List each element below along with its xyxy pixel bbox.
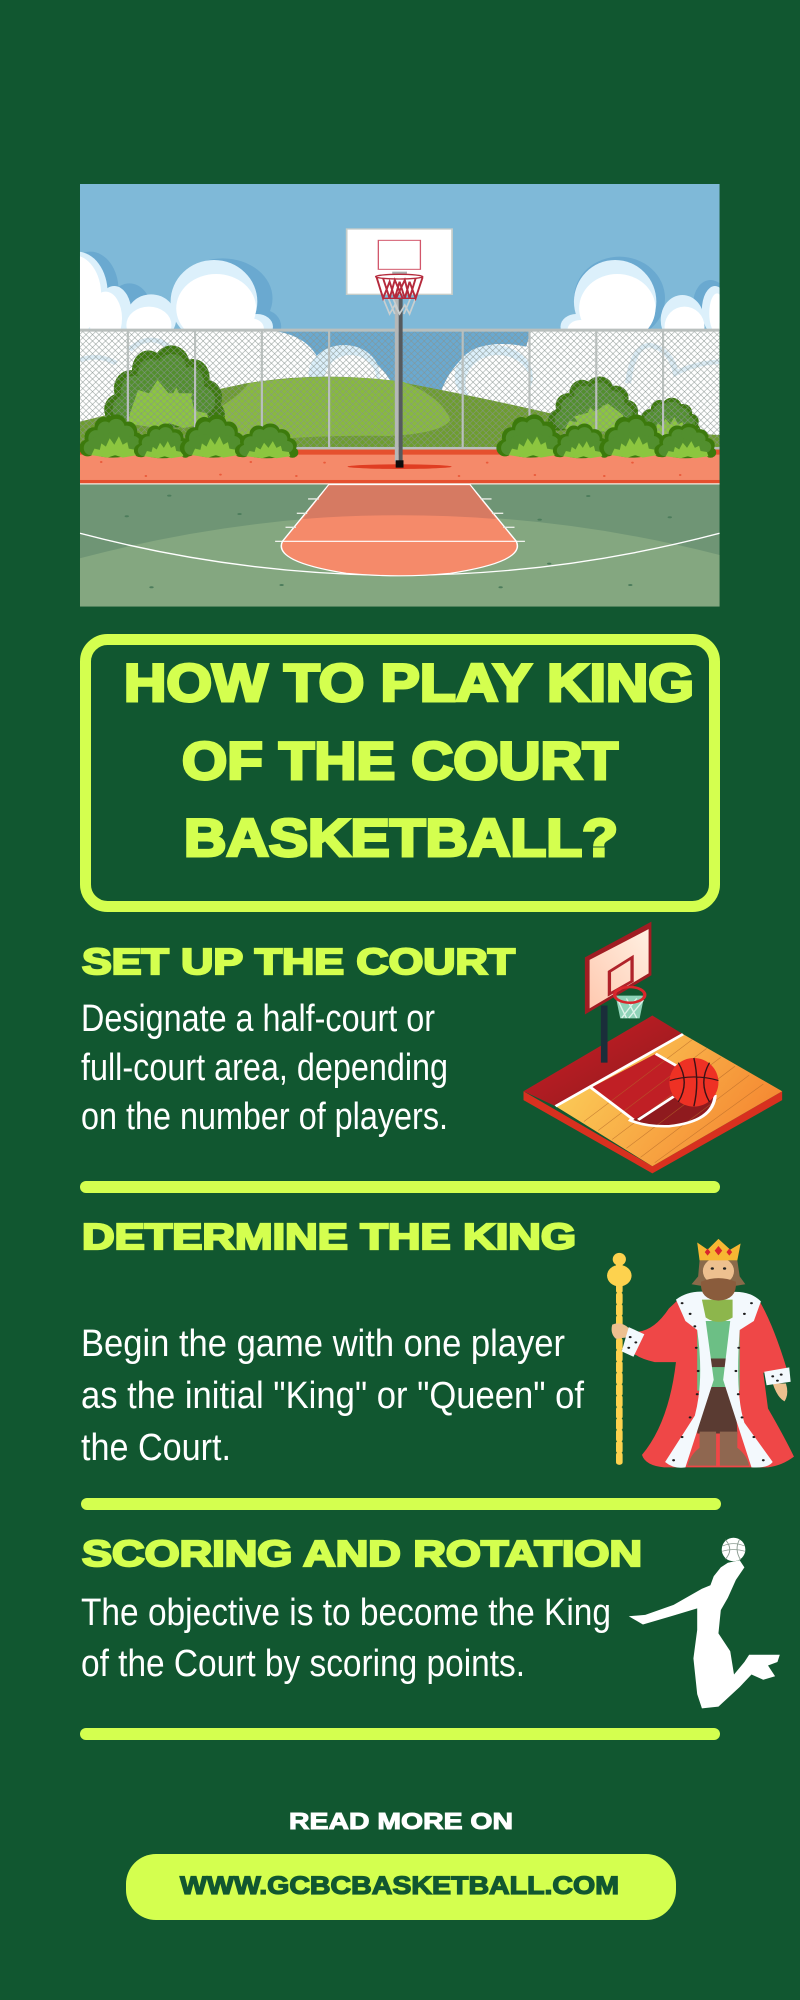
title text [124, 654, 694, 868]
back bushes [104, 345, 225, 428]
icon: player silhouette dunking [629, 1538, 780, 1708]
icon: king with scepter [607, 1239, 794, 1468]
url pill: WWW.GCBCBASKETBALL.COM [180, 1872, 619, 1900]
body text: full-court area, depending [81, 1047, 448, 1089]
chain-link mesh [80, 331, 720, 449]
heading: SET UP THE COURT [82, 941, 515, 982]
body text [81, 1592, 611, 1685]
panel: scoring and rotation [81, 1533, 780, 1708]
body text [81, 998, 448, 1138]
hoop and net [376, 274, 423, 314]
divider [80, 1728, 720, 1740]
hoop pole [348, 298, 452, 469]
title frame [86, 640, 714, 906]
title text: BASKETBALL? [184, 809, 618, 868]
three-point arc [80, 533, 720, 575]
panel: set up the court [81, 922, 782, 1173]
heading: DETERMINE THE KING [82, 1216, 576, 1257]
body text: the Court. [81, 1427, 231, 1469]
hands and cuffs [612, 1323, 791, 1401]
url pill [126, 1854, 676, 1920]
body text: as the initial "King" or "Queen" of [81, 1375, 584, 1417]
icon: isometric court with hoop and ball [524, 922, 782, 1173]
body text: of the Court by scoring points. [81, 1643, 525, 1685]
body text: Designate a half-court or [81, 998, 435, 1040]
front bushes [79, 414, 716, 458]
body text: on the number of players. [81, 1096, 448, 1138]
call to action [126, 1808, 676, 1920]
illustration: outdoor basketball court [45, 184, 728, 607]
title panel [86, 640, 714, 906]
title text: HOW TO PLAY KING [124, 654, 694, 713]
fence posts [80, 329, 720, 449]
heading: SCORING AND ROTATION [82, 1533, 642, 1574]
divider [80, 1181, 720, 1193]
body text [81, 1323, 584, 1469]
free-throw lane [275, 485, 525, 576]
backboard [347, 229, 452, 294]
head and crown [692, 1239, 745, 1301]
green court [80, 484, 720, 558]
hill [80, 377, 720, 449]
read more label: READ MORE ON [289, 1808, 513, 1834]
orange ground [80, 449, 720, 484]
panel: determine the king [81, 1216, 794, 1469]
divider [81, 1498, 721, 1510]
body text: Begin the game with one player [81, 1323, 565, 1365]
clouds [80, 252, 720, 330]
title text: OF THE COURT [182, 732, 618, 791]
scepter [607, 1253, 632, 1465]
sky [80, 184, 720, 331]
body text: The objective is to become the King [81, 1592, 611, 1634]
robe [631, 1292, 794, 1468]
background behind fence [80, 331, 720, 449]
